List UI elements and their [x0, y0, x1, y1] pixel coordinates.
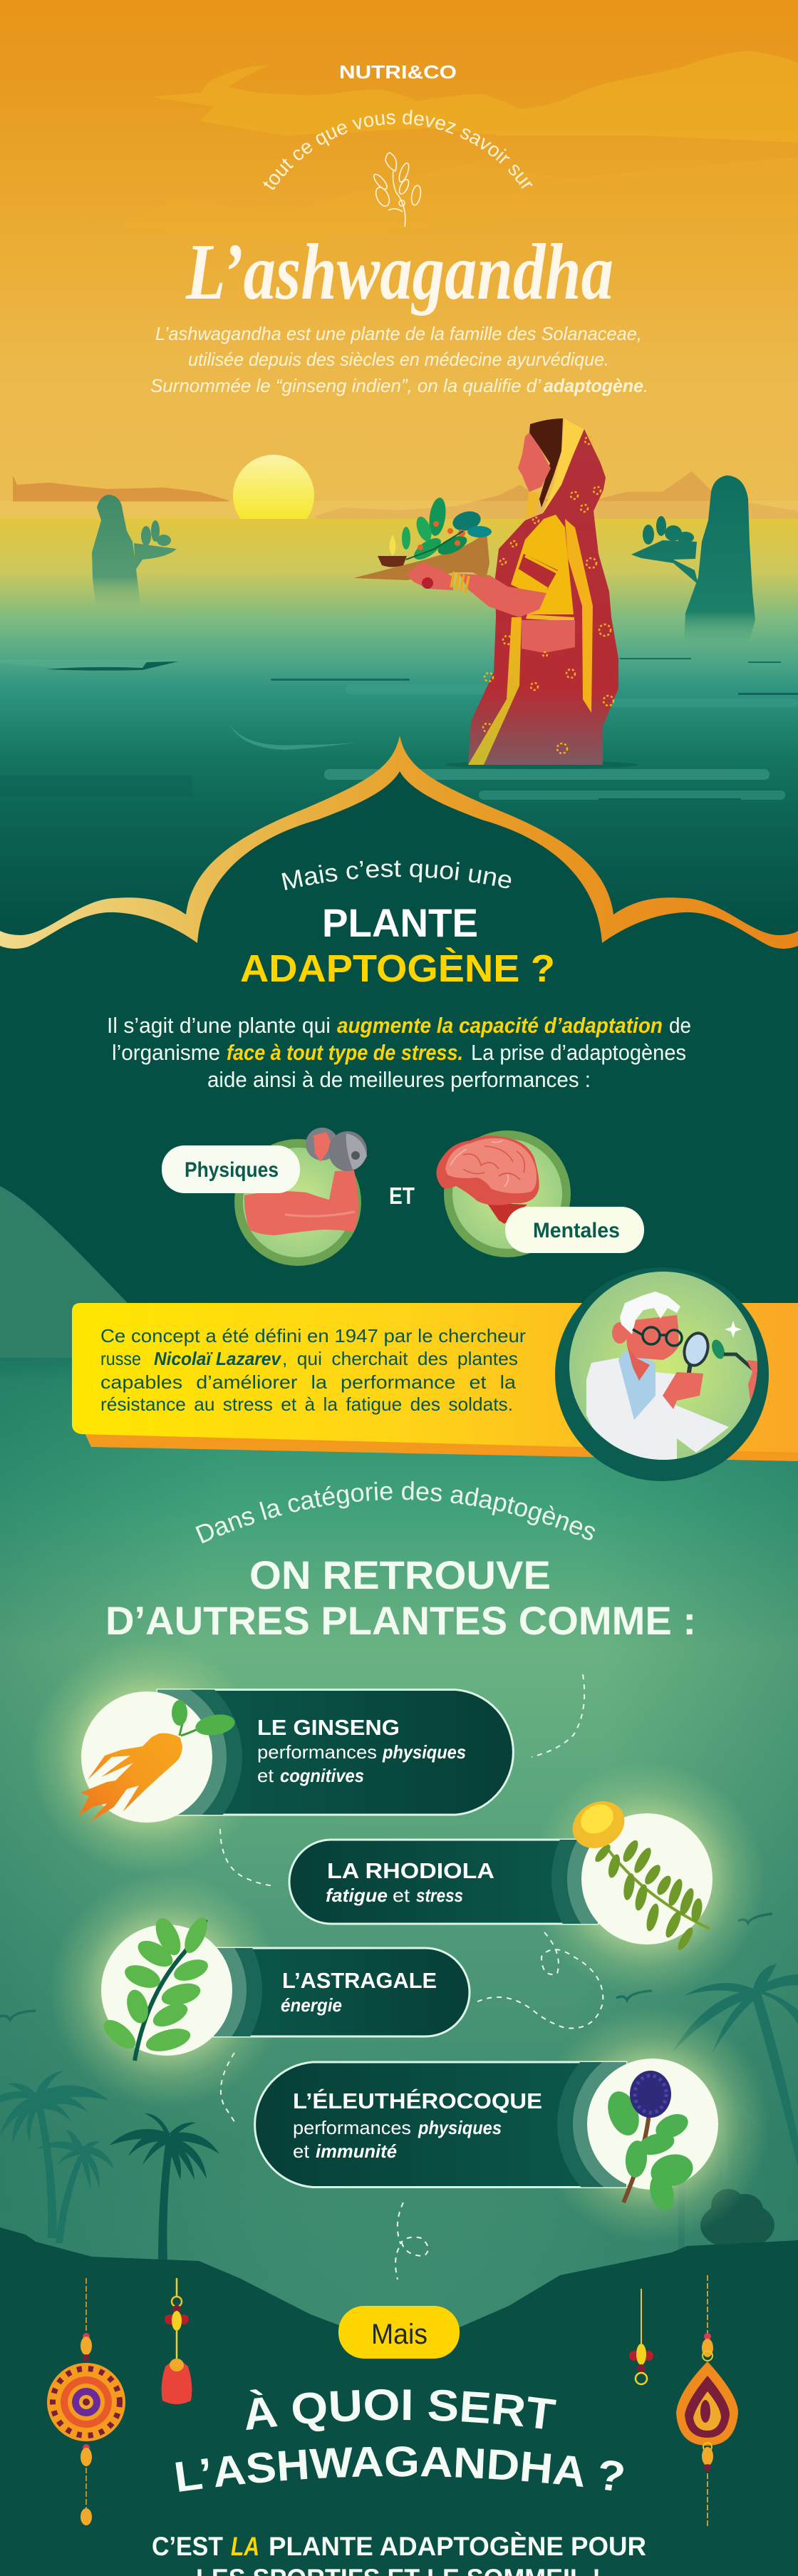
ginseng text	[257, 1715, 466, 1786]
intro paragraph: augmente la capacité d’adaptation	[337, 1013, 663, 1038]
eleutherocoque text	[293, 2088, 542, 2162]
saree motifs	[483, 437, 613, 753]
dashed connector lines	[220, 1674, 603, 2279]
waist bands	[526, 614, 574, 622]
lower water background	[0, 1358, 798, 2341]
tray	[353, 532, 489, 580]
banner body	[72, 1303, 798, 1453]
rhodiola text: stress	[416, 1885, 463, 1906]
section: other plants heading	[105, 1481, 696, 1643]
magnifier	[683, 1331, 710, 1373]
logo: NUTRI&CO	[339, 61, 457, 83]
heading curved line one: À QUOI SERT	[246, 2389, 556, 2432]
right distant hills	[316, 471, 798, 519]
dark hill	[0, 2227, 798, 2576]
astragale text: L’ASTRAGALE	[282, 1968, 437, 1993]
right bush	[678, 2181, 774, 2250]
faded right palm	[688, 2102, 759, 2181]
icon: rhodiola	[564, 1792, 710, 1952]
intro paragraph: La prise d’adaptogènes	[471, 1040, 686, 1065]
main woman	[353, 418, 618, 765]
heading: PLANTE	[322, 900, 478, 945]
sky clouds	[122, 51, 798, 242]
intro paragraph	[107, 1013, 691, 1092]
card: eleutherocoque	[255, 2006, 770, 2242]
pill: physiques: Physiques	[185, 1158, 279, 1182]
banner text: , qui cherchait des plantes	[282, 1348, 518, 1369]
ornament: right charm	[629, 2289, 653, 2384]
eleutherocoque text: et	[293, 2140, 310, 2162]
heading	[105, 1552, 696, 1643]
left palm two	[36, 2130, 114, 2243]
background palms and birds	[0, 1914, 798, 2262]
left silhouette woman	[92, 495, 177, 612]
intro paragraph: Il s’agit d’une plante qui	[107, 1013, 331, 1038]
neck scarf	[526, 492, 539, 517]
curved subtitle: Dans la catégorie des adaptogènes	[195, 1481, 595, 1544]
banner text: Nicolaï Lazarev	[154, 1348, 281, 1369]
banner text	[100, 1325, 526, 1415]
banner text: Ce concept a été défini en 1947 par le chercheur	[100, 1325, 526, 1346]
banner text: capables d’améliorer la performance et la	[100, 1371, 517, 1393]
lamp	[378, 535, 407, 567]
saree	[468, 418, 618, 765]
left palm one	[0, 2071, 109, 2238]
shirt	[618, 1351, 656, 1420]
sparkle	[725, 1321, 742, 1338]
conclusion lines: C’EST	[152, 2532, 223, 2561]
hair	[620, 1292, 680, 1334]
rhodiola text: fatigue	[326, 1885, 388, 1906]
ear	[612, 1322, 628, 1344]
dome arch golden band	[0, 736, 798, 949]
bangles	[451, 572, 469, 593]
intro paragraph: l’organisme	[112, 1040, 220, 1065]
face	[518, 433, 551, 492]
eleutherocoque text: physiques	[418, 2117, 502, 2138]
pill: mentales: Mentales	[533, 1219, 620, 1242]
main title: L’ashwagandha	[185, 228, 613, 316]
section: plante adaptogene	[0, 736, 798, 1266]
eleutherocoque text: immunité	[316, 2140, 397, 2162]
horizon glow	[0, 501, 798, 519]
conclusion lines: LA	[231, 2532, 259, 2561]
icon: plant sprig	[372, 153, 422, 227]
sun	[233, 455, 314, 519]
blouse	[511, 515, 574, 614]
label: ET: ET	[389, 1183, 415, 1209]
curved intro text: tout ce que vous devez savoir sur	[263, 110, 533, 190]
ring	[422, 577, 433, 589]
hero scene	[0, 51, 798, 800]
intro paragraph: de	[669, 1013, 691, 1038]
ornament: right paisley	[676, 2275, 738, 2528]
card: astragale	[49, 1872, 470, 2108]
right silhouette woman	[631, 475, 755, 645]
water ripples	[0, 658, 798, 800]
hand	[663, 1372, 703, 1409]
card: rhodiola	[289, 1761, 765, 1997]
neck	[627, 1346, 650, 1381]
side vignette	[0, 1358, 798, 2341]
veil band	[543, 418, 584, 513]
glasses	[633, 1327, 682, 1346]
pill: Mais	[338, 2306, 460, 2359]
rhodiola text: LA RHODIOLA	[327, 1858, 494, 1883]
intro text: Surnommée le “ginseng indien”, on la qualifie d’	[150, 375, 542, 396]
left distant hills	[13, 475, 229, 502]
intro text: L’ashwagandha est une plante de la famille des Solanaceae,	[155, 323, 642, 344]
ginseng text: LE GINSENG	[257, 1715, 400, 1740]
astragale text: énergie	[281, 1994, 342, 2016]
dome arch dark panel	[0, 771, 798, 1354]
icon: eleutherocoque	[602, 2071, 697, 2213]
intro paragraph: aide ainsi à de meilleures performances :	[207, 1067, 591, 1092]
heading: D’AUTRES PLANTES COMME :	[105, 1598, 696, 1643]
ginseng text: physiques	[382, 1741, 466, 1763]
ornament: left mandala	[47, 2278, 125, 2525]
intro text: .	[643, 375, 648, 396]
curved subtitle: Mais c’est quoi une	[281, 860, 512, 890]
card: ginseng	[29, 1639, 513, 1875]
eleutherocoque text: L’ÉLEUTHÉROCOQUE	[293, 2088, 542, 2113]
intro text: adaptogène	[544, 375, 643, 396]
arm	[460, 574, 546, 617]
ginseng text: cognitives	[280, 1765, 364, 1786]
icon: astragale branch	[99, 1914, 212, 2061]
conclusion lines: PLANTE ADAPTOGÈNE POUR	[269, 2532, 646, 2561]
pill: Mais: Mais	[371, 2319, 428, 2350]
banner text: russe	[100, 1348, 141, 1369]
icon: ginseng root	[78, 1700, 237, 1823]
left mountain	[0, 1186, 127, 1365]
section: a quoi sert	[47, 2275, 738, 2576]
heading curved line two: L’ASHWAGANDHA ?	[175, 2446, 623, 2492]
sleeve	[518, 554, 558, 589]
heading: ON RETROUVE	[249, 1552, 551, 1597]
heading: ADAPTOGÈNE ?	[240, 947, 555, 990]
intro text: utilisée depuis des siècles en médecine ayurvédique.	[188, 349, 609, 370]
panel: Lazarev callout	[72, 1267, 798, 1481]
ginseng text: performances	[257, 1741, 377, 1763]
ginseng text: et	[257, 1765, 274, 1786]
rhodiola text: et	[393, 1885, 410, 1906]
eleutherocoque text: performances	[293, 2117, 411, 2138]
head	[626, 1315, 679, 1360]
intro text	[150, 323, 648, 396]
saree yellow band left	[468, 617, 522, 765]
heading	[240, 900, 555, 990]
conclusion lines	[152, 2532, 646, 2576]
astragale text	[281, 1968, 437, 2016]
lab coat	[586, 1358, 729, 1468]
ornament: left tassel	[162, 2278, 192, 2404]
hair	[529, 418, 563, 508]
pill: physiques	[162, 1145, 300, 1193]
scientist medallion	[555, 1267, 769, 1481]
banner text: résistance au stress et à la fatigue des soldats.	[100, 1393, 513, 1415]
belly	[522, 620, 575, 653]
left palm three	[109, 2113, 219, 2262]
saree yellow band right	[565, 519, 593, 713]
rhodiola text	[326, 1858, 494, 1906]
right palm	[672, 1964, 798, 2167]
birds	[0, 1914, 772, 2020]
intro paragraph: face à tout type de stress.	[227, 1040, 463, 1065]
hand	[407, 562, 453, 590]
icon: brain	[436, 1130, 571, 1257]
offering plants	[402, 497, 492, 564]
pill: mentales	[505, 1207, 644, 1253]
banner shadow	[81, 1426, 798, 1461]
leaf and branch	[712, 1340, 757, 1401]
icon: muscle	[234, 1128, 367, 1266]
